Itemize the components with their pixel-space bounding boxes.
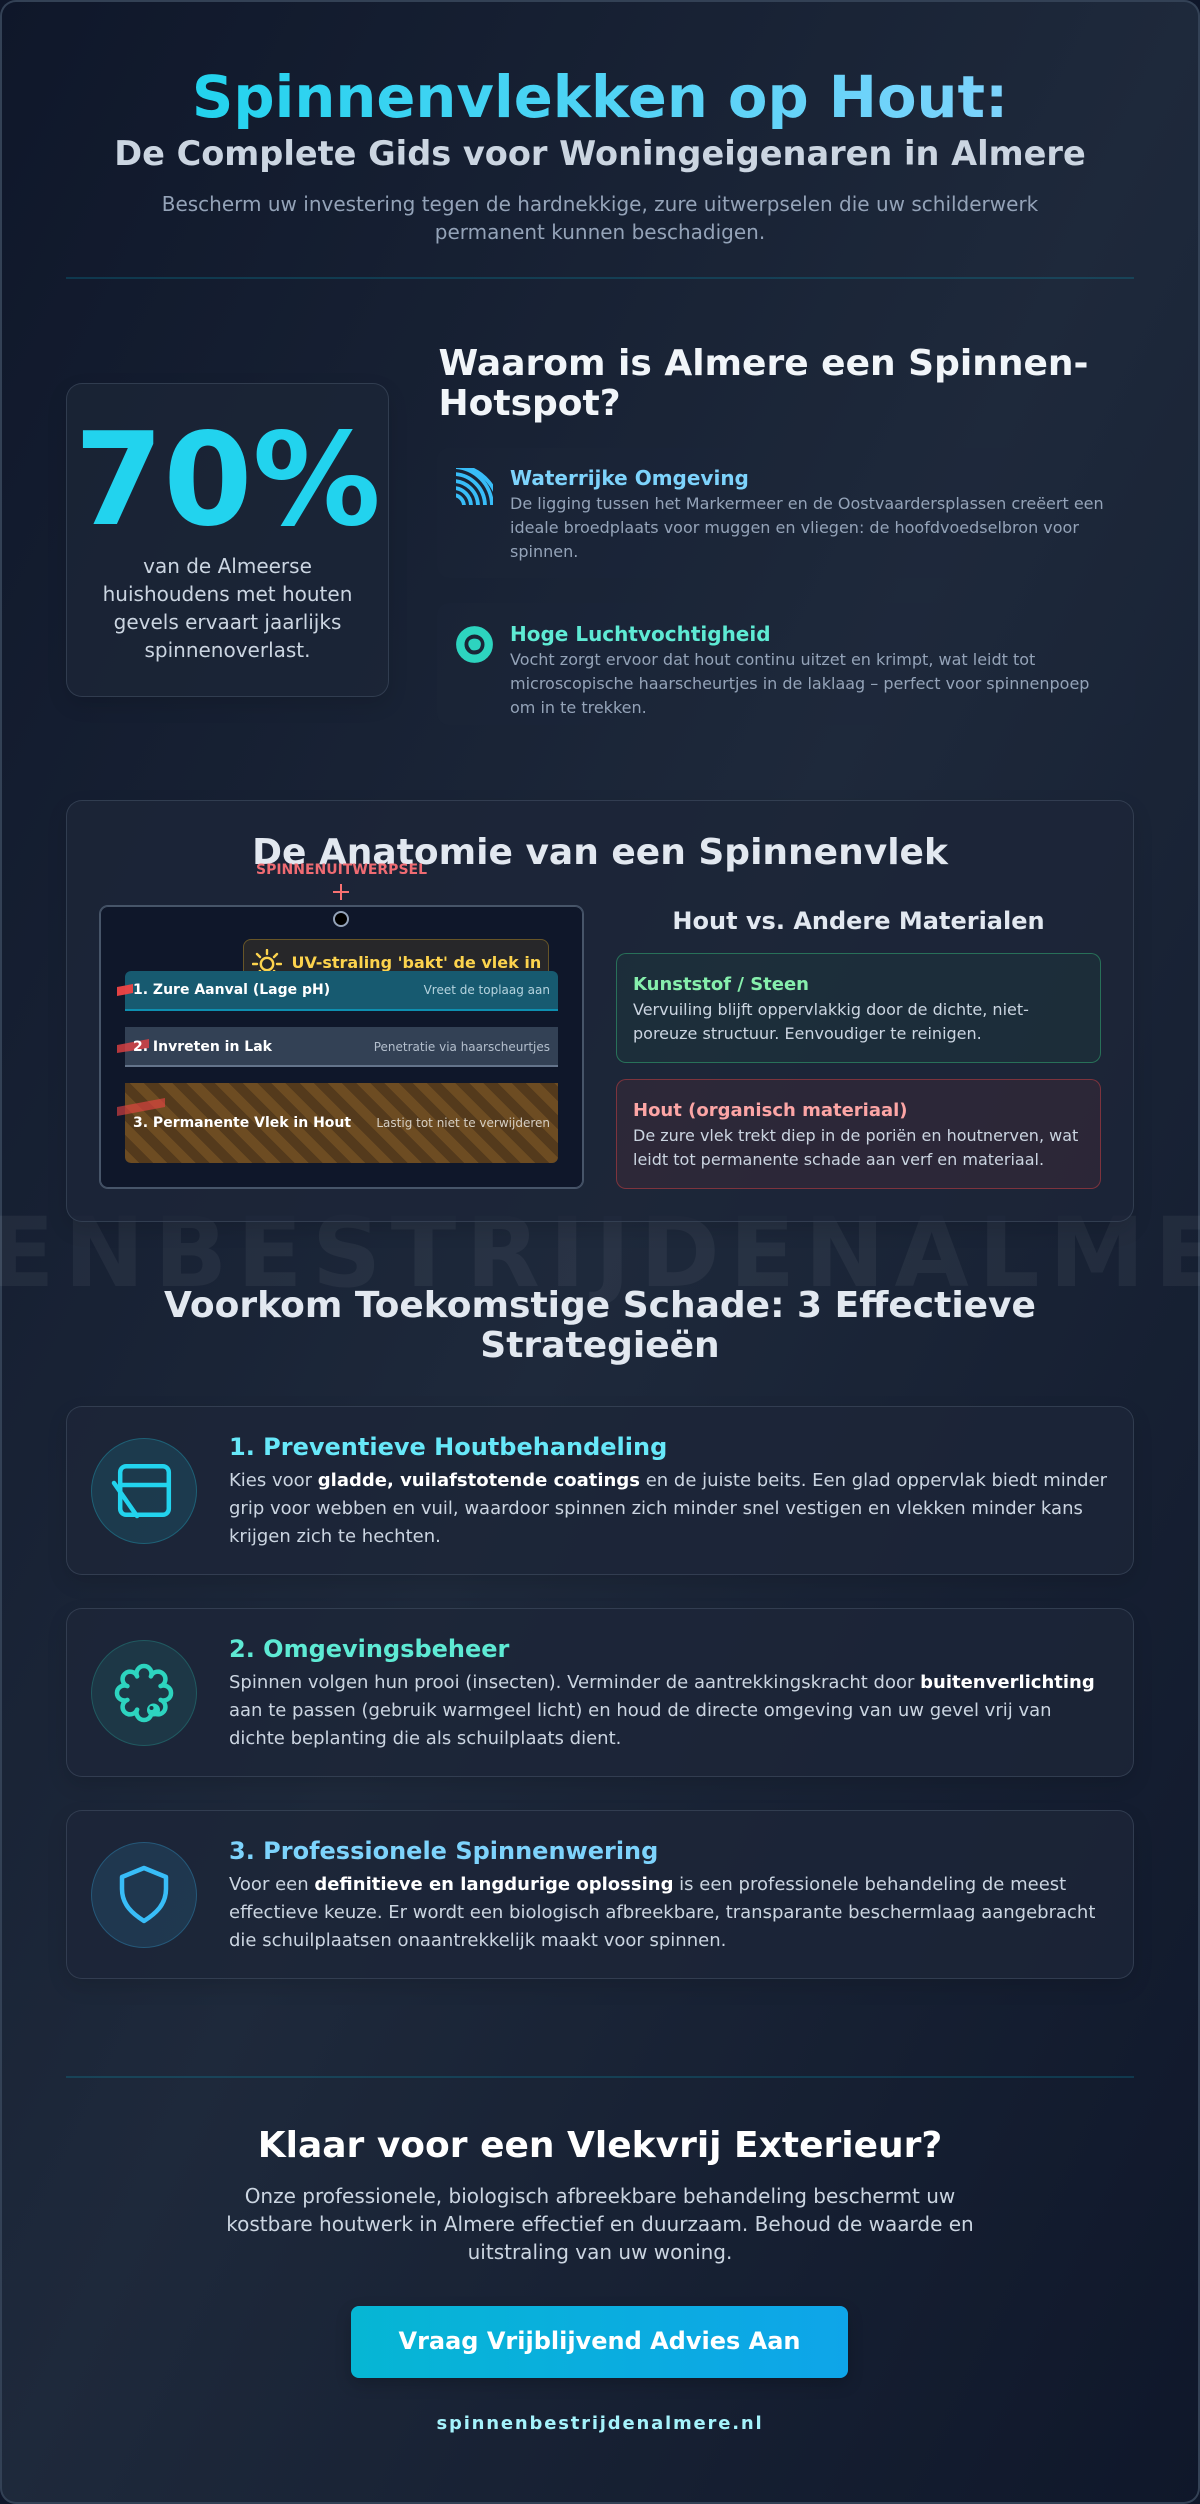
strategy text: die schuilplaatsen onaantrekkelijk maakt voor spinnen.	[229, 1930, 726, 1951]
cta button: Vraag Vrijblijvend Advies Aan	[398, 2327, 800, 2355]
layer 2 title: 2. Invreten in Lak	[133, 1039, 272, 1055]
strategy text	[229, 1672, 1095, 1749]
layer 1 note: Vreet de toplaag aan	[424, 983, 550, 997]
icon: waves	[456, 468, 493, 505]
hout text: leidt tot permanente schade aan verf en materiaal.	[633, 1150, 1044, 1168]
strategy text: Spinnen volgen hun prooi (insecten). Verminder de aantrekkingskracht door buitenverlichting	[229, 1672, 1095, 1693]
item title: Waterrijke Omgeving	[510, 466, 749, 490]
layer 1 title: 1. Zure Aanval (Lage pH)	[133, 982, 330, 998]
item text	[510, 494, 1104, 560]
intro text: permanent kunnen beschadigen.	[435, 220, 765, 244]
comparison: kunststof	[616, 953, 1101, 1063]
subtitle: De Complete Gids voor Woningeigenaren in Almere	[114, 134, 1086, 173]
panel: strategy 3	[66, 1810, 1134, 1979]
strategy text: krijgen zich te hechten.	[229, 1526, 441, 1547]
strategy text: aan te passen (gebruik warmgeel licht) en houd de directe omgeving van uw gevel vrij van	[229, 1700, 1052, 1721]
strategy text: grip voor webben en vuil, waardoor spinnen zich minder snel vestigen en vlekken minder kans	[229, 1498, 1083, 1519]
statistic caption: gevels ervaart jaarlijks	[114, 610, 341, 634]
strategy text: Voor een definitieve en langdurige oplossing is een professionele behandeling de meest	[229, 1874, 1066, 1895]
hout text	[633, 1126, 1078, 1168]
hout title: Hout (organisch materiaal)	[633, 1100, 908, 1120]
strategy text	[229, 1470, 1107, 1547]
kunststof text	[633, 1000, 1029, 1042]
item text: ideale broedplaats voor muggen en vliegen: de hoofdvoedselbron voor	[510, 518, 1079, 536]
heading: waarom hotspot: Hotspot?	[438, 383, 621, 424]
icon: bug blob	[91, 1640, 197, 1746]
strategy title: 1. Preventieve Houtbehandeling	[229, 1433, 667, 1461]
intro text: Bescherm uw investering tegen de hardnekkige, zure uitwerpselen die uw schilderwerk	[162, 192, 1038, 216]
layer 1	[125, 971, 558, 1011]
heading: hout vs andere: Hout vs. Andere Materialen	[672, 907, 1045, 935]
strategy title: 2. Omgevingsbeheer	[229, 1635, 509, 1663]
heading: strategieen	[164, 1285, 1036, 1366]
layer 3 title: 3. Permanente Vlek in Hout	[133, 1115, 351, 1131]
header	[114, 64, 1086, 244]
panel: 70% statistic	[66, 383, 389, 697]
website link: spinnenbestrijdenalmere.nl	[437, 2413, 763, 2434]
strategy text	[229, 1874, 1095, 1951]
item text	[510, 650, 1089, 716]
heading: waarom hotspot	[438, 343, 1088, 424]
heading: waarom hotspot: Waarom is Almere een Spinnen-	[438, 343, 1088, 384]
heading: strategieen: Voorkom Toekomstige Schade: 3 Effectieve	[164, 1285, 1036, 1326]
stain penetration strips	[117, 984, 165, 1116]
item text: spinnen.	[510, 542, 578, 560]
strategy title: 3. Professionele Spinnenwering	[229, 1837, 658, 1865]
callout: uv	[242, 939, 549, 989]
layer 3 note: Lastig tot niet te verwijderen	[376, 1116, 550, 1130]
marker: spinnenuitwerpsel: SPINNENUITWERPSEL	[256, 862, 427, 878]
item text: om in te trekken.	[510, 698, 647, 716]
kunststof title: Kunststof / Steen	[633, 974, 809, 994]
cta text: kostbare houtwerk in Almere effectief en duurzaam. Behoud de waarde en	[226, 2212, 974, 2236]
marker: spinnenuitwerpsel	[256, 862, 427, 927]
panel: strategy 1	[66, 1406, 1134, 1575]
cta button	[351, 2306, 848, 2378]
kunststof text: Vervuiling blijft oppervlakkig door de dichte, niet-	[633, 1000, 1029, 1018]
strategy text: effectieve keuze. Er wordt een biologisch afbreekbare, transparante beschermlaag aangebracht	[229, 1902, 1095, 1923]
uv text: UV-straling 'bakt' de vlek in	[292, 952, 541, 972]
cta text: Onze professionele, biologisch afbreekbare behandeling beschermt uw	[245, 2184, 955, 2208]
statistic caption: spinnenoverlast.	[144, 638, 311, 662]
heading: anatomie: De Anatomie van een Spinnenvlek	[252, 832, 948, 872]
layer 2 note: Penetratie via haarscheurtjes	[374, 1040, 550, 1054]
item text: De ligging tussen het Markermeer en de Oostvaardersplassen creëert een	[510, 494, 1104, 512]
icon: sun	[252, 949, 282, 971]
strategy text: dichte beplanting die als schuilplaats dient.	[229, 1728, 621, 1749]
panel: waterrijke omgeving	[437, 448, 1135, 578]
diagram: layers	[100, 906, 583, 1188]
item text: microscopische haarscheurtjes in de laklaag – perfect voor spinnenpoep	[510, 674, 1089, 692]
strategy text: Kies voor gladde, vuilafstotende coatings en de juiste beits. Een glad oppervlak biedt minder	[229, 1470, 1107, 1491]
statistic caption	[103, 554, 352, 662]
hout text: De zure vlek trekt diep in de poriën en houtnerven, wat	[633, 1126, 1078, 1144]
big number: 70%	[74, 406, 381, 555]
panel: hoge luchtvochtigheid	[437, 603, 1135, 725]
layer 2	[125, 1027, 558, 1067]
call to action	[226, 2124, 974, 2434]
cta heading: Klaar voor een Vlekvrij Exterieur?	[258, 2124, 942, 2166]
statistic caption: van de Almeerse	[143, 554, 312, 578]
icon: humidity ring	[456, 626, 493, 663]
icon: coating	[91, 1438, 197, 1544]
cta text: uitstraling van uw woning.	[468, 2240, 732, 2264]
cta text	[226, 2184, 974, 2264]
item title: Hoge Luchtvochtigheid	[510, 622, 771, 646]
panel: anatomie	[66, 800, 1134, 1222]
comparison: hout	[616, 1079, 1101, 1189]
panel: strategy 2	[66, 1608, 1134, 1777]
item text: Vocht zorgt ervoor dat hout continu uitzet en krimpt, wat leidt tot	[510, 650, 1035, 668]
heading: strategieen: Strategieën	[480, 1325, 720, 1366]
statistic caption: huishoudens met houten	[103, 582, 352, 606]
title: Spinnenvlekken op Hout:	[192, 64, 1008, 131]
icon: shield	[91, 1842, 197, 1948]
layer 3	[125, 1083, 558, 1163]
intro text	[162, 192, 1038, 244]
kunststof text: poreuze structuur. Eenvoudiger te reinigen.	[633, 1024, 982, 1042]
